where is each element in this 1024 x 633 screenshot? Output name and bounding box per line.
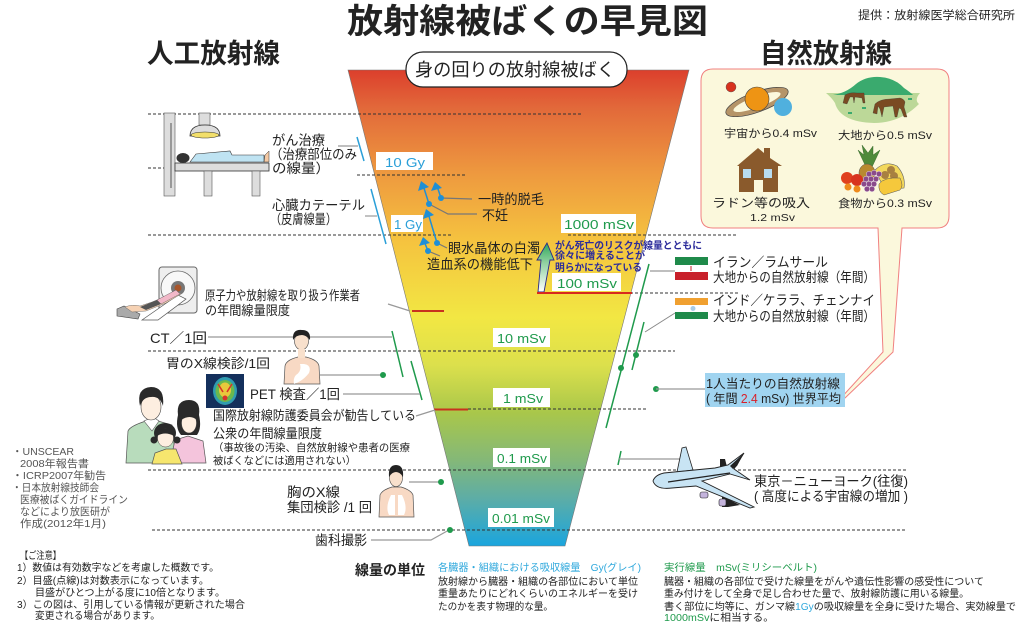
icon: horses on land bbox=[826, 77, 920, 123]
mSv definition: 書く部位に均等に、ガンマ線1Gyの吸収線量を全身に受けた場合、実効線量で bbox=[664, 600, 1016, 613]
dose label 1 mSv bbox=[493, 388, 550, 407]
label: cancer therapy: の線量） bbox=[272, 161, 330, 176]
icon: planets bbox=[723, 81, 792, 123]
label: cardiac catheter bbox=[270, 198, 365, 227]
references note: 2008年報告書 bbox=[20, 457, 89, 470]
label: Iran: イラン／ラムサール bbox=[713, 255, 828, 270]
label: PET: PET 検査／1回 bbox=[250, 387, 340, 402]
label: chest X-ray: 集団検診 /1 回 bbox=[287, 500, 372, 515]
dashed scale lines bbox=[148, 114, 907, 530]
cancer risk note: 明らかになっている bbox=[555, 262, 642, 274]
mSv definition: 重み付けをして全身で足し合わせた量で、放射線防護に用いる線量。 bbox=[664, 587, 969, 600]
cancer risk note: 徐々に増えることが bbox=[555, 249, 645, 262]
label: cardiac catheter: （皮膚線量） bbox=[270, 212, 337, 227]
icon: Iran flag bbox=[675, 257, 708, 280]
CT connector and range bbox=[208, 331, 422, 400]
label: chest X-ray: 胸のX線 bbox=[287, 485, 341, 500]
references note: ・日本放射線技師会 bbox=[12, 481, 99, 494]
chest connector bbox=[409, 479, 444, 485]
label: Tokyo New York flight: 東京－ニューヨーク(往復) bbox=[754, 473, 908, 489]
cancer risk note: がん死亡のリスクが線量とともに bbox=[555, 239, 702, 252]
label: ICRP public dose limit: （事故後の汚染、自然放射線や患者の医療 bbox=[213, 441, 410, 454]
icon: person with lungs bbox=[379, 465, 414, 517]
dental connector bbox=[371, 527, 453, 540]
references note: などにより放医研が bbox=[20, 505, 110, 518]
notes block: 1）数値は有効数字などを考慮した概数です。 bbox=[17, 561, 219, 574]
label: Iran bbox=[713, 255, 875, 285]
notes block: 【ご注意】 bbox=[20, 549, 61, 562]
heading: dose units: 線量の単位 bbox=[355, 562, 425, 578]
label: from space: 宇宙から0.4 mSv bbox=[724, 127, 818, 140]
label: India: 大地からの自然放射線（年間） bbox=[713, 308, 875, 324]
effects labels bbox=[427, 192, 544, 272]
arrows: deterministic effect thresholds bbox=[418, 181, 477, 256]
effects labels: 眼水晶体の白濁 bbox=[448, 241, 540, 256]
connector to world average bbox=[653, 386, 705, 392]
Gy definition: 重量あたりにどれくらいのエネルギーを受け bbox=[438, 587, 638, 600]
label: India bbox=[713, 293, 875, 324]
label: ICRP public dose limit: 被ばくなどには適用されない） bbox=[213, 454, 356, 467]
funnel chart background bbox=[348, 70, 689, 546]
icon: family bbox=[126, 387, 206, 464]
label: India: インド／ケララ、チェンナイ bbox=[713, 293, 875, 308]
references note: 作成(2012年1月) bbox=[20, 517, 106, 530]
label: stomach X-ray: 胃のX線検診/1回 bbox=[166, 356, 270, 371]
dose label 1 mSv: 1 mSv bbox=[503, 391, 544, 406]
references note: ・ICRP2007年勧告 bbox=[12, 469, 106, 482]
heading: natural radiation: 自然放射線 bbox=[760, 39, 892, 69]
notes block bbox=[17, 549, 245, 622]
references note bbox=[12, 446, 128, 530]
label: chest X-ray bbox=[287, 485, 372, 515]
label: ICRP public dose limit bbox=[213, 408, 416, 467]
effects labels: 造血系の機能低下 bbox=[427, 257, 533, 272]
references note: ・UNSCEAR bbox=[12, 446, 74, 458]
dose label 10 Gy: 10 Gy bbox=[385, 155, 426, 170]
notes block: 3）この図は、引用している情報が更新された場合 bbox=[17, 598, 245, 611]
icon: PET scan bbox=[206, 374, 244, 408]
dose label 10 mSv bbox=[493, 328, 550, 347]
references note: 医療被ばくガイドライン bbox=[20, 493, 128, 506]
funnel heading pill: 身の回りの放射線被ばく bbox=[415, 60, 615, 80]
icon: house bbox=[737, 148, 782, 192]
label: radon: 1.2 mSv bbox=[750, 212, 796, 224]
mSv definition bbox=[664, 561, 1016, 624]
dose label 1000 mSv bbox=[561, 214, 636, 233]
label: Tokyo New York flight: ( 高度による宇宙線の増加 ) bbox=[754, 488, 908, 504]
arrow: cancer risk bbox=[537, 243, 554, 292]
stomach connector bbox=[320, 372, 386, 378]
Gy definition: 放射線から臓器・組織の各部位において単位 bbox=[438, 575, 638, 588]
icon: CT scanner bbox=[117, 267, 197, 320]
dose label 1 Gy: 1 Gy bbox=[394, 217, 422, 232]
label: CT one scan: CT／1回 bbox=[150, 330, 207, 346]
icon: radiotherapy table bbox=[164, 113, 269, 196]
label: ICRP public dose limit: 公衆の年間線量限度 bbox=[213, 426, 322, 441]
callout: world average bbox=[705, 373, 845, 407]
Gy definition: 各臓器・組織における吸収線量 Gy(グレイ) bbox=[438, 561, 641, 574]
label: cardiac catheter: 心臓カテーテル bbox=[272, 198, 365, 213]
mSv definition: 1000mSv に相当する。 bbox=[664, 611, 774, 624]
dose label 10 Gy bbox=[376, 152, 433, 170]
label: Iran: 大地からの自然放射線（年間） bbox=[713, 269, 875, 285]
label: radon: ラドン等の吸入 bbox=[712, 196, 810, 210]
effects labels: 不妊 bbox=[482, 208, 508, 223]
natural radiation callout panel bbox=[701, 69, 949, 399]
effects labels: 一時的脱毛 bbox=[478, 192, 544, 207]
label: from food: 食物から0.3 mSv bbox=[838, 196, 933, 210]
label: occupational limit: 原子力や放射線を取り扱う作業者 bbox=[205, 288, 360, 303]
callout: world average: ( 年間 2.4 mSv) 世界平均 bbox=[706, 392, 841, 406]
mSv definition: 臓器・組織の各部位で受けた線量をがんや遺伝性影響の感受性について bbox=[664, 575, 984, 588]
label: dental: 歯科撮影 bbox=[315, 532, 367, 548]
icon: food bbox=[841, 145, 904, 195]
dose label 0.01 mSv bbox=[488, 508, 554, 527]
dose label 0.1 mSv bbox=[493, 448, 550, 467]
source credit: 提供：放射線医学総合研究所 bbox=[858, 8, 1016, 22]
dose label 100 mSv bbox=[552, 273, 621, 291]
dose label 100 mSv: 100 mSv bbox=[557, 276, 618, 291]
icon: person with stomach bbox=[284, 330, 320, 384]
funnel heading pill bbox=[406, 52, 627, 87]
blue range markers bbox=[338, 137, 386, 244]
label: cancer therapy bbox=[270, 133, 357, 176]
callout: world average: 1人当たりの自然放射線 bbox=[706, 376, 841, 391]
red lines: dose limits bbox=[412, 293, 632, 410]
notes block: 変更される場合があります。 bbox=[35, 609, 160, 622]
notes block: 目盛がひとつ上がる度に10倍となります。 bbox=[35, 586, 225, 599]
dose label 1000 mSv: 1000 mSv bbox=[564, 217, 635, 232]
ICRP connector bbox=[416, 410, 435, 416]
label: radon bbox=[712, 196, 810, 224]
dose label 0.1 mSv: 0.1 mSv bbox=[497, 451, 548, 466]
dose label 0.01 mSv: 0.01 mSv bbox=[492, 511, 551, 526]
mSv definition: 実行線量 mSv(ミリシーベルト) bbox=[664, 561, 817, 574]
flight connector bbox=[618, 451, 680, 465]
label: cancer therapy: （治療部位のみ bbox=[270, 147, 357, 162]
Gy definition bbox=[438, 561, 641, 613]
label: occupational limit: の年間線量限度 bbox=[205, 303, 290, 318]
label: cancer therapy: がん治療 bbox=[272, 133, 325, 148]
label: from ground: 大地から0.5 mSv bbox=[838, 128, 933, 142]
dose label 10 mSv: 10 mSv bbox=[497, 331, 547, 346]
PET connector bbox=[343, 393, 420, 395]
icon: airplane bbox=[653, 447, 754, 508]
cancer risk note bbox=[555, 239, 702, 274]
heading: artificial radiation: 人工放射線 bbox=[147, 39, 280, 69]
title: 放射線被ばくの早見図 bbox=[347, 3, 708, 41]
green range markers with dots bbox=[606, 264, 675, 428]
Gy definition: たのかを表す物理的な量。 bbox=[438, 600, 553, 613]
label: ICRP public dose limit: 国際放射線防護委員会が勧告している bbox=[213, 408, 416, 423]
icon: India flag bbox=[675, 298, 708, 319]
notes block: 2）目盛(点線)は対数表示になっています。 bbox=[17, 574, 209, 587]
label: occupational limit bbox=[205, 288, 410, 318]
label: Tokyo New York flight bbox=[754, 473, 908, 504]
